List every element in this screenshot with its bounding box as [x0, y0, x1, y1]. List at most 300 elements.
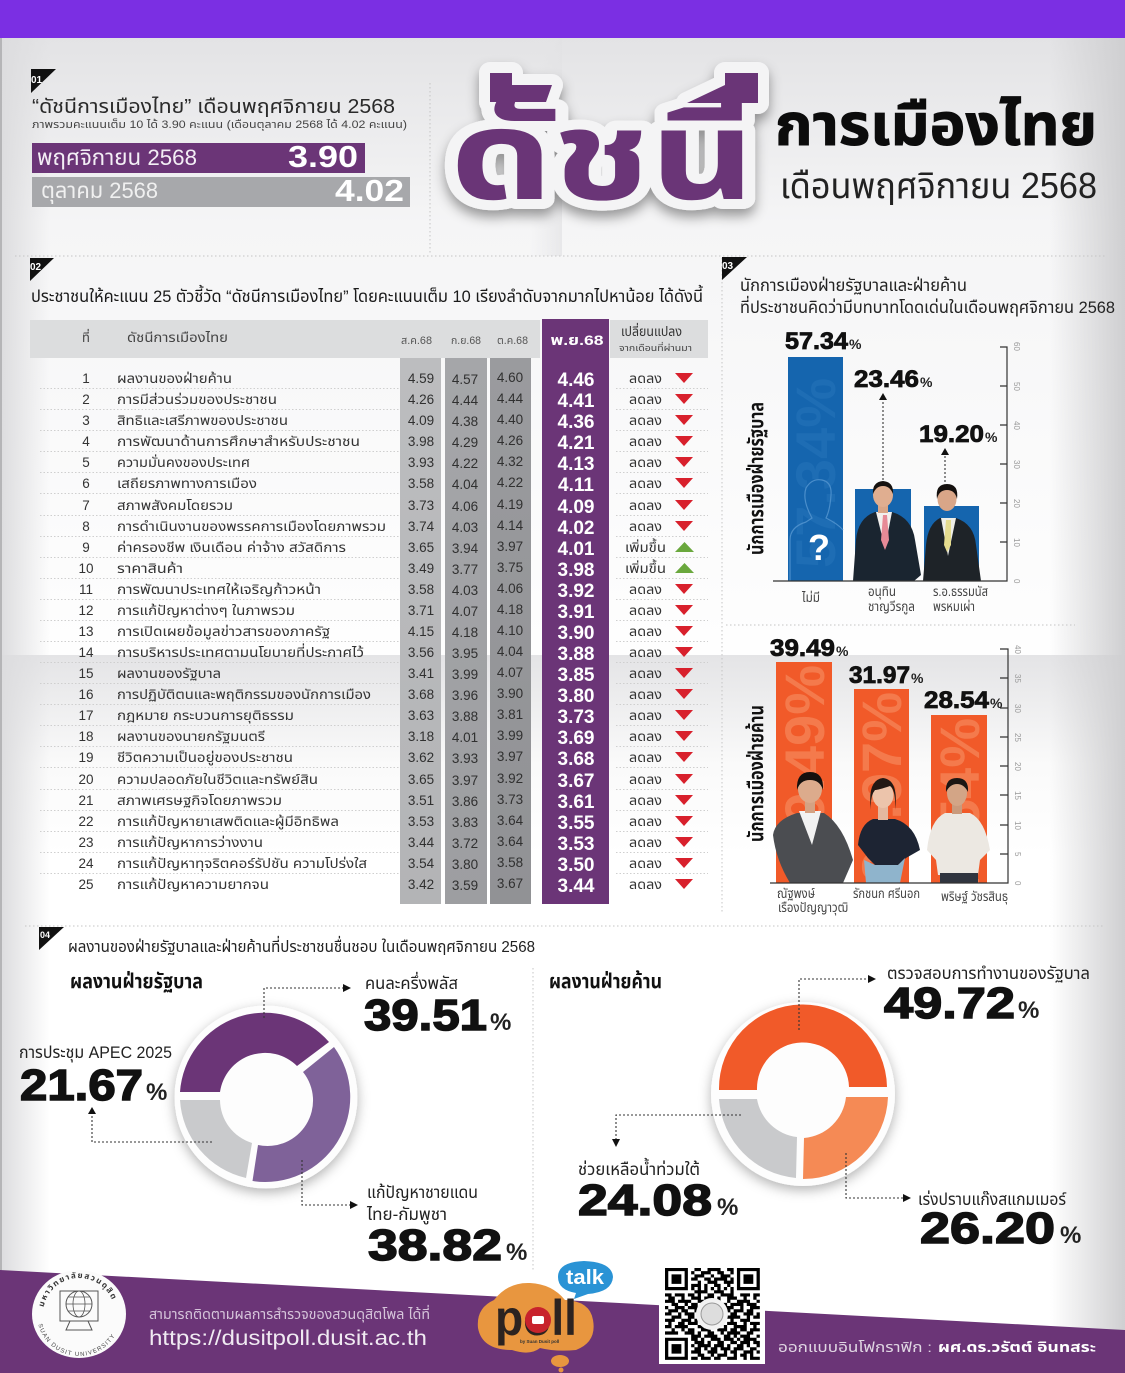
table row 25: 3.42 — [408, 877, 434, 892]
table row 22: การแก้ปัญหายาเสพติดและผู้มีอิทธิพล — [117, 814, 339, 830]
donut chart: opposition — [711, 1002, 895, 1186]
table row 17: 17 — [78, 708, 94, 723]
table row 15: 3.41 — [408, 666, 434, 681]
value: 23.46% with arrow — [854, 366, 933, 480]
table row 10: 3.49 — [408, 561, 434, 576]
vertical label: opposition: นักการเมืองฝ่ายค้าน — [745, 705, 768, 842]
table row 25: 25 — [78, 877, 94, 892]
callout: flood relief: 24.08 — [578, 1176, 712, 1225]
table row 2: 2 — [82, 392, 90, 407]
table row 5: 3.93 — [408, 455, 434, 470]
badge 03 — [722, 257, 747, 280]
table row 12: 12 — [78, 603, 94, 618]
table row 7: 4.19 — [497, 497, 523, 512]
table row 20: ความปลอดภัยในชีวิตและทรัพย์สิน — [117, 772, 318, 787]
table row 2: 4.44 — [497, 391, 524, 406]
table row 22 — [78, 813, 693, 834]
table row 17: 3.88 — [452, 709, 478, 724]
table row 6 — [82, 475, 693, 496]
vertical label: government: นักการเมืองฝ่ายรัฐบาล — [745, 402, 768, 555]
callout: scrutiny: 49.72 — [884, 979, 1015, 1028]
table row 12 — [78, 602, 693, 623]
table row 19: 3.97 — [497, 749, 523, 764]
table row 10: 3.98 — [558, 560, 594, 581]
callout: scam gangs: % — [1060, 1222, 1081, 1249]
table row 23: 3.64 — [497, 834, 524, 849]
callout: scrutiny: % — [1018, 997, 1039, 1024]
table row 8: การดำเนินงานของพรรคการเมืองโดยภาพรวม — [117, 519, 386, 534]
table row 4: 4.21 — [558, 433, 595, 454]
axis: 35 — [1013, 674, 1022, 683]
table row 20: ลดลง — [629, 772, 662, 787]
callout: scam gangs: เร่งปราบแก๊งสแกมเมอร์ — [918, 1190, 1067, 1209]
table row 9: 3.97 — [497, 539, 523, 554]
panel 01: overall score — [31, 69, 410, 208]
table row 24: การแก้ปัญหาทุจริตคอร์รัปชัน ความโปร่งใส — [117, 855, 367, 872]
table row 13 — [78, 623, 693, 644]
table row 18: 18 — [78, 729, 94, 744]
table row 17: 3.73 — [558, 707, 594, 728]
table row 10: ราคาสินค้า — [117, 561, 183, 576]
table row 1: 4.46 — [558, 370, 594, 391]
table row 16: การปฏิบัติตนและพฤติกรรมของนักการเมือง — [117, 687, 371, 702]
table row 19 — [78, 749, 693, 770]
callout: flood relief — [578, 1115, 741, 1225]
table row 14: ลดลง — [629, 645, 662, 660]
table header: จากเดือนที่ผ่านมา — [619, 341, 692, 353]
table row 3: 4.36 — [558, 412, 594, 433]
table row 4: 4.29 — [452, 435, 478, 450]
axis: 40 — [1012, 421, 1021, 430]
designer credit — [778, 1339, 1096, 1355]
table row 11: ลดลง — [629, 582, 662, 597]
table row 24: 3.58 — [497, 855, 523, 870]
table row 9: เพิ่มขึ้น — [625, 538, 666, 555]
badge 02: 02 — [30, 262, 42, 273]
bar: October score: ตุลาคม 2568 — [41, 178, 158, 204]
badge 03: 03 — [722, 261, 734, 272]
table row 1: 4.59 — [408, 371, 434, 386]
bar: none: 57.34% — [784, 378, 847, 568]
table row 8: 4.03 — [452, 520, 478, 535]
table row 8: ลดลง — [629, 519, 662, 534]
value: 57.34%: % — [849, 336, 862, 352]
value: 19.20% with arrow — [919, 421, 998, 482]
table row 5: 4.13 — [558, 454, 594, 475]
top purple band — [0, 0, 1125, 38]
table row 11: 4.03 — [452, 583, 478, 598]
table row 22: ลดลง — [629, 814, 662, 829]
table row 20: 3.67 — [558, 771, 594, 792]
table row 11: 4.06 — [497, 581, 523, 596]
logo: Suan Dusit University: SUAN DUSIT UNIVERSITY — [38, 1324, 114, 1356]
table row 23: 3.72 — [452, 836, 478, 851]
callout: half plus: 39.51 — [364, 991, 487, 1040]
table header: ต.ค.68 — [497, 335, 528, 347]
table row 10: 3.77 — [452, 562, 478, 577]
table row 14: 3.56 — [408, 645, 434, 660]
table row 15: 15 — [78, 666, 94, 681]
badge 01 — [31, 69, 56, 93]
table row 9: 4.01 — [558, 539, 595, 560]
heading 03 — [740, 275, 1115, 317]
table row 23: ลดลง — [629, 835, 662, 850]
table row 22: 3.83 — [452, 815, 478, 830]
axis: 25 — [1013, 733, 1022, 742]
table row 3: 4.38 — [452, 414, 478, 429]
table row 16: ลดลง — [629, 687, 662, 702]
table row 16: 3.80 — [558, 686, 594, 707]
table row 6: 4.04 — [452, 477, 479, 492]
table row 4: 3.98 — [408, 434, 434, 449]
title word: dashanee: ดัชนี — [450, 87, 755, 226]
bar: November score: พฤศจิกายน 2568 — [37, 145, 197, 170]
table row 7: ลดลง — [629, 498, 662, 513]
callout: flood relief: % — [717, 1194, 738, 1221]
table row 5: 4.32 — [497, 454, 523, 469]
table row 21: 3.51 — [408, 793, 434, 808]
subheading 01: ภาพรวมคะแนนเต็ม 10 ได้ 3.90 คะแนน (เดือนตุลาคม 2568 ได้ 4.02 คะแนน) — [32, 119, 407, 131]
table row 17: 3.63 — [408, 708, 434, 723]
title line: politics Thailand: การเมืองไทย — [775, 93, 1097, 158]
table row 18: 3.18 — [408, 729, 434, 744]
table row 12: 4.07 — [452, 604, 478, 619]
name labels: opposition: พริษฐ์ วัชรสินธุ — [941, 889, 1008, 904]
table row 1: ผลงานของฝ่ายค้าน — [117, 371, 232, 386]
callout: border — [302, 1160, 527, 1270]
table row 6: ลดลง — [629, 476, 662, 491]
table row 24: 3.54 — [408, 856, 435, 871]
table row 13: 3.90 — [558, 623, 594, 644]
table row 17 — [78, 707, 693, 728]
table row 10 — [78, 559, 694, 581]
table row 23: การแก้ปัญหาการว่างงาน — [117, 834, 263, 850]
table row 4: 4 — [82, 434, 90, 449]
bar: Parit with portrait: 28.54% — [928, 718, 991, 908]
name labels: opposition — [777, 886, 1008, 915]
table row 10: 3.75 — [497, 560, 523, 575]
table header: เปลี่ยนแปลง — [621, 322, 682, 339]
table row 13: การเปิดเผยข้อมูลข่าวสารของภาครัฐ — [117, 623, 330, 640]
table row 14: 14 — [78, 645, 94, 660]
badge 02 — [30, 258, 54, 281]
bar: November score — [32, 139, 365, 174]
table row 9: 3.65 — [408, 540, 434, 555]
badge 01: 01 — [31, 75, 43, 86]
title word: dashanee — [450, 73, 758, 226]
table row 16 — [78, 686, 693, 707]
callout: half plus: % — [490, 1009, 511, 1036]
table row 7: สภาพสังคมโดยรวม — [117, 498, 233, 513]
value: 19.20% with arrow: 19.20 — [919, 421, 984, 448]
table row 8: 8 — [82, 519, 90, 534]
axis — [770, 645, 1022, 886]
table row 15: ผลงานของรัฐบาล — [117, 666, 221, 681]
table row 13: 4.18 — [452, 625, 478, 640]
table row 14: 3.88 — [558, 644, 594, 665]
table row 5: 5 — [82, 455, 90, 470]
axis — [773, 342, 1021, 584]
table row 11: การพัฒนาประเทศให้เจริญก้าวหน้า — [117, 582, 321, 597]
logo: poll talk: poll — [495, 1290, 577, 1346]
axis: 0 — [1012, 579, 1021, 584]
table row 18 — [78, 728, 693, 749]
table row 15: 3.99 — [452, 667, 478, 682]
table row 11: 11 — [79, 582, 93, 597]
callout: border: 38.82 — [368, 1221, 502, 1270]
table row 15: ลดลง — [629, 666, 662, 681]
score columns — [400, 319, 609, 904]
table row 13: ลดลง — [629, 624, 662, 639]
name labels: government — [801, 584, 988, 614]
table header — [30, 320, 708, 358]
table row 21: 3.73 — [497, 792, 523, 807]
table row 2: การมีส่วนร่วมของประชาชน — [117, 391, 277, 407]
bar: October score — [32, 173, 410, 208]
table row 14: 3.95 — [452, 646, 478, 661]
table row 2: ลดลง — [629, 392, 662, 407]
axis: 0 — [1013, 881, 1022, 886]
table row 1: 4.57 — [452, 372, 478, 387]
logo: poll talk: talk — [566, 1267, 605, 1289]
table header: ก.ย.68 — [451, 335, 481, 347]
table row 4: การพัฒนาด้านการศึกษาสำหรับประชาชน — [117, 434, 360, 449]
table row 1: 4.60 — [497, 370, 523, 385]
table row 20: 20 — [78, 772, 94, 787]
value: 39.49%: % — [836, 643, 849, 659]
table row 6: 3.58 — [408, 476, 434, 491]
badge 04 — [39, 927, 64, 950]
table row 23: 3.44 — [408, 835, 435, 850]
value: 23.46% with arrow: % — [920, 374, 933, 390]
table row 20: 3.92 — [497, 771, 523, 786]
title line: month: เดือนพฤศจิกายน 2568 — [780, 165, 1097, 206]
table row 10: 10 — [78, 561, 94, 576]
table row 21: ลดลง — [629, 793, 662, 808]
callout: border: แก้ปัญหาชายแดน — [367, 1182, 478, 1202]
name labels: government: ร.อ.ธรรมนัส — [933, 584, 988, 599]
subheading: opposition: ผลงานฝ่ายค้าน — [549, 970, 662, 993]
table row 24: ลดลง — [629, 856, 662, 871]
table row 4: 4.26 — [497, 433, 523, 448]
table row 6: 4.11 — [558, 475, 594, 496]
heading 04: ผลงานของฝ่ายรัฐบาลและฝ่ายค้านที่ประชาชนชื่นชอบ ในเดือนพฤศจิกายน 2568 — [68, 935, 535, 956]
table row 6: 6 — [82, 476, 90, 491]
table row 10: เพิ่มขึ้น — [625, 559, 666, 576]
table row 21: 3.86 — [452, 794, 478, 809]
table row 22: 3.55 — [558, 813, 595, 834]
callout: scam gangs — [846, 1153, 1081, 1253]
subheading: government: ผลงานฝ่ายรัฐบาล — [70, 970, 203, 993]
axis: 40 — [1013, 645, 1022, 654]
table row 1 — [82, 370, 693, 391]
table header: ส.ค.68 — [401, 335, 432, 347]
value: 28.54%: % — [990, 695, 1003, 711]
axis: 20 — [1013, 762, 1022, 771]
axis: 30 — [1012, 460, 1021, 469]
table row 14: การบริหารประเทศตามนโยบายที่ประกาศไว้ — [117, 643, 364, 660]
table row 7: 3.73 — [408, 498, 434, 513]
table row 2 — [82, 391, 693, 412]
table row 14 — [78, 643, 693, 665]
table row 4: ลดลง — [629, 434, 662, 449]
table row 23: 3.53 — [558, 834, 594, 855]
axis: 20 — [1012, 499, 1021, 508]
table header: ดัชนีการเมืองไทย — [127, 330, 228, 345]
table row 25: การแก้ปัญหาความยากจน — [117, 877, 269, 892]
table row 5: ความมั่นคงของประเทศ — [117, 454, 250, 470]
table row 18: 3.99 — [497, 728, 523, 743]
table row 13: 4.15 — [408, 624, 434, 639]
heading 01: “ดัชนีการเมืองไทย” เดือนพฤศจิกายน 2568 — [32, 96, 395, 118]
table row 2: 4.41 — [558, 391, 595, 412]
table row 5: 4.22 — [452, 456, 478, 471]
name labels: government: ไม่มี — [801, 590, 820, 605]
table row 22: 3.64 — [497, 813, 524, 828]
bar: none: ? — [808, 527, 830, 568]
table row 1: ลดลง — [629, 371, 662, 386]
table row 16: 3.90 — [497, 686, 523, 701]
table row 12: การแก้ปัญหาต่างๆ ในภาพรวม — [117, 602, 295, 618]
value: 19.20% with arrow: % — [985, 429, 998, 445]
name labels: opposition: ณัฐพงษ์ — [777, 886, 815, 901]
table row 1: 1 — [82, 371, 90, 386]
bar: Anutin with portrait — [853, 481, 921, 581]
table row 23: 23 — [78, 835, 94, 850]
designer credit: ผศ.ดร.วรัตต์ อินทสระ — [938, 1339, 1096, 1355]
name labels: opposition: รักชนก ศรีนอก — [853, 886, 920, 901]
axis: 50 — [1012, 382, 1021, 391]
table row 13: 13 — [78, 624, 94, 639]
table header: ที่ — [82, 328, 90, 345]
table row 15: 4.07 — [497, 665, 523, 680]
table row 19: 3.62 — [408, 750, 434, 765]
table row 3: ลดลง — [629, 413, 662, 428]
table row 11 — [79, 581, 693, 602]
name labels: government: พรหมเผ่า — [933, 599, 975, 614]
bar chart: government politicians — [745, 328, 1021, 614]
table row 25: 3.44 — [558, 876, 595, 897]
follow text: สามารถติดตามผลการสำรวจของสวนดุสิตโพล ได้ที่ — [149, 1304, 430, 1323]
table row 5: ลดลง — [629, 455, 662, 470]
axis: 15 — [1013, 791, 1022, 800]
table row 20: 3.97 — [452, 773, 478, 788]
callout: APEC: การประชุม APEC 2025 — [19, 1043, 172, 1063]
table row 12: ลดลง — [629, 603, 662, 618]
logo: poll talk: by Suan Dusit poll — [520, 1339, 559, 1344]
table row 2: 4.26 — [408, 392, 434, 407]
name labels: government: อนุทิน — [868, 584, 896, 599]
logo: Suan Dusit University — [32, 1272, 126, 1358]
table row 18: 4.01 — [452, 730, 478, 745]
footer — [0, 1261, 1125, 1373]
callout: border: % — [506, 1239, 527, 1266]
table row 21: สภาพเศรษฐกิจโดยภาพรวม — [117, 793, 282, 808]
logo: Suan Dusit University: มหาวิทยาลัยสวนดุสิต — [40, 1272, 116, 1307]
table row 6: เสถียรภาพทางการเมือง — [117, 476, 257, 491]
table row 9: 3.94 — [452, 541, 479, 556]
badge 04: 04 — [40, 930, 50, 940]
table row 24: 24 — [78, 856, 94, 871]
score columns: พ.ย.68 — [550, 332, 604, 348]
callout: scrutiny — [799, 964, 1090, 1030]
table row 3: 3 — [82, 413, 90, 428]
table row 19: ชีวิตความเป็นอยู่ของประชาชน — [117, 749, 293, 766]
table row 21 — [78, 792, 693, 813]
table row 25: 3.67 — [497, 876, 523, 891]
axis: 30 — [1013, 704, 1022, 713]
table row 17: 3.81 — [497, 707, 523, 722]
table row 8: 4.14 — [497, 518, 524, 533]
footer band — [0, 1270, 1125, 1373]
table row 7: 4.09 — [558, 497, 594, 518]
bar: Natthaphong with portrait — [773, 662, 853, 883]
table row 5 — [82, 454, 693, 475]
heading 03: ที่ประชาชนคิดว่ามีบทบาทโดดเด่นในเดือนพฤศจิกายน 2568 — [740, 295, 1115, 317]
bar: October score: 4.02 — [335, 173, 404, 208]
table row 16: 3.68 — [408, 687, 434, 702]
table row 3: 4.40 — [497, 412, 523, 427]
table row 8: 3.74 — [408, 519, 435, 534]
panel 04: favourite performance — [19, 927, 1090, 1270]
bar: Rakchanok with portrait: 31.97% — [850, 692, 913, 882]
table row 15 — [78, 665, 693, 686]
table row 22: 22 — [78, 814, 94, 829]
table row 17: กฎหมาย กระบวนการยุติธรรม — [117, 708, 294, 724]
axis: 10 — [1013, 821, 1022, 830]
table row 15: 3.85 — [558, 665, 595, 686]
table row 8: 4.02 — [558, 518, 594, 539]
callout: scrutiny: ตรวจสอบการทำงานของรัฐบาล — [887, 964, 1090, 983]
callout: APEC — [19, 1043, 212, 1142]
main title — [450, 73, 1097, 226]
callout: half plus: คนละครึ่งพลัส — [365, 971, 458, 993]
value: 39.49%: 39.49 — [770, 635, 835, 662]
value: 31.97%: 31.97 — [849, 662, 910, 689]
designer credit: ออกแบบอินโฟกราฟิก : — [778, 1339, 932, 1355]
table row 7: 7 — [82, 498, 90, 513]
table row 22: 3.53 — [408, 814, 434, 829]
table row 3: สิทธิและเสรีภาพของประชาชน — [117, 413, 288, 428]
table row 8 — [82, 518, 693, 539]
table row 19: ลดลง — [629, 750, 662, 765]
table row 9: 9 — [82, 540, 90, 555]
table row 18: ผลงานของนายกรัฐมนตรี — [117, 729, 265, 744]
table row 11: 3.92 — [558, 581, 594, 602]
callout: APEC: % — [146, 1079, 167, 1106]
callout: border: ไทย-กัมพูชา — [366, 1205, 447, 1226]
table row 20 — [78, 771, 693, 792]
axis: 5 — [1013, 852, 1022, 857]
axis: 60 — [1012, 342, 1021, 351]
table row 4 — [82, 433, 693, 454]
table row 3: 4.09 — [408, 413, 434, 428]
callout: half plus — [264, 971, 511, 1040]
table row 18: 3.69 — [558, 728, 594, 749]
value: 31.97%: % — [911, 670, 924, 686]
table row 18: ลดลง — [629, 729, 662, 744]
table row 7 — [82, 497, 693, 518]
table row 19: 19 — [78, 750, 94, 765]
table row 19: 3.93 — [452, 751, 478, 766]
table row 16: 16 — [78, 687, 94, 702]
callout: scam gangs: 26.20 — [920, 1204, 1055, 1253]
name labels: government: ชาญวีรกูล — [868, 599, 915, 614]
table row 24: 3.50 — [558, 855, 594, 876]
table row 23 — [78, 834, 693, 855]
table row 2: 4.44 — [452, 393, 479, 408]
QR code — [659, 1264, 765, 1364]
